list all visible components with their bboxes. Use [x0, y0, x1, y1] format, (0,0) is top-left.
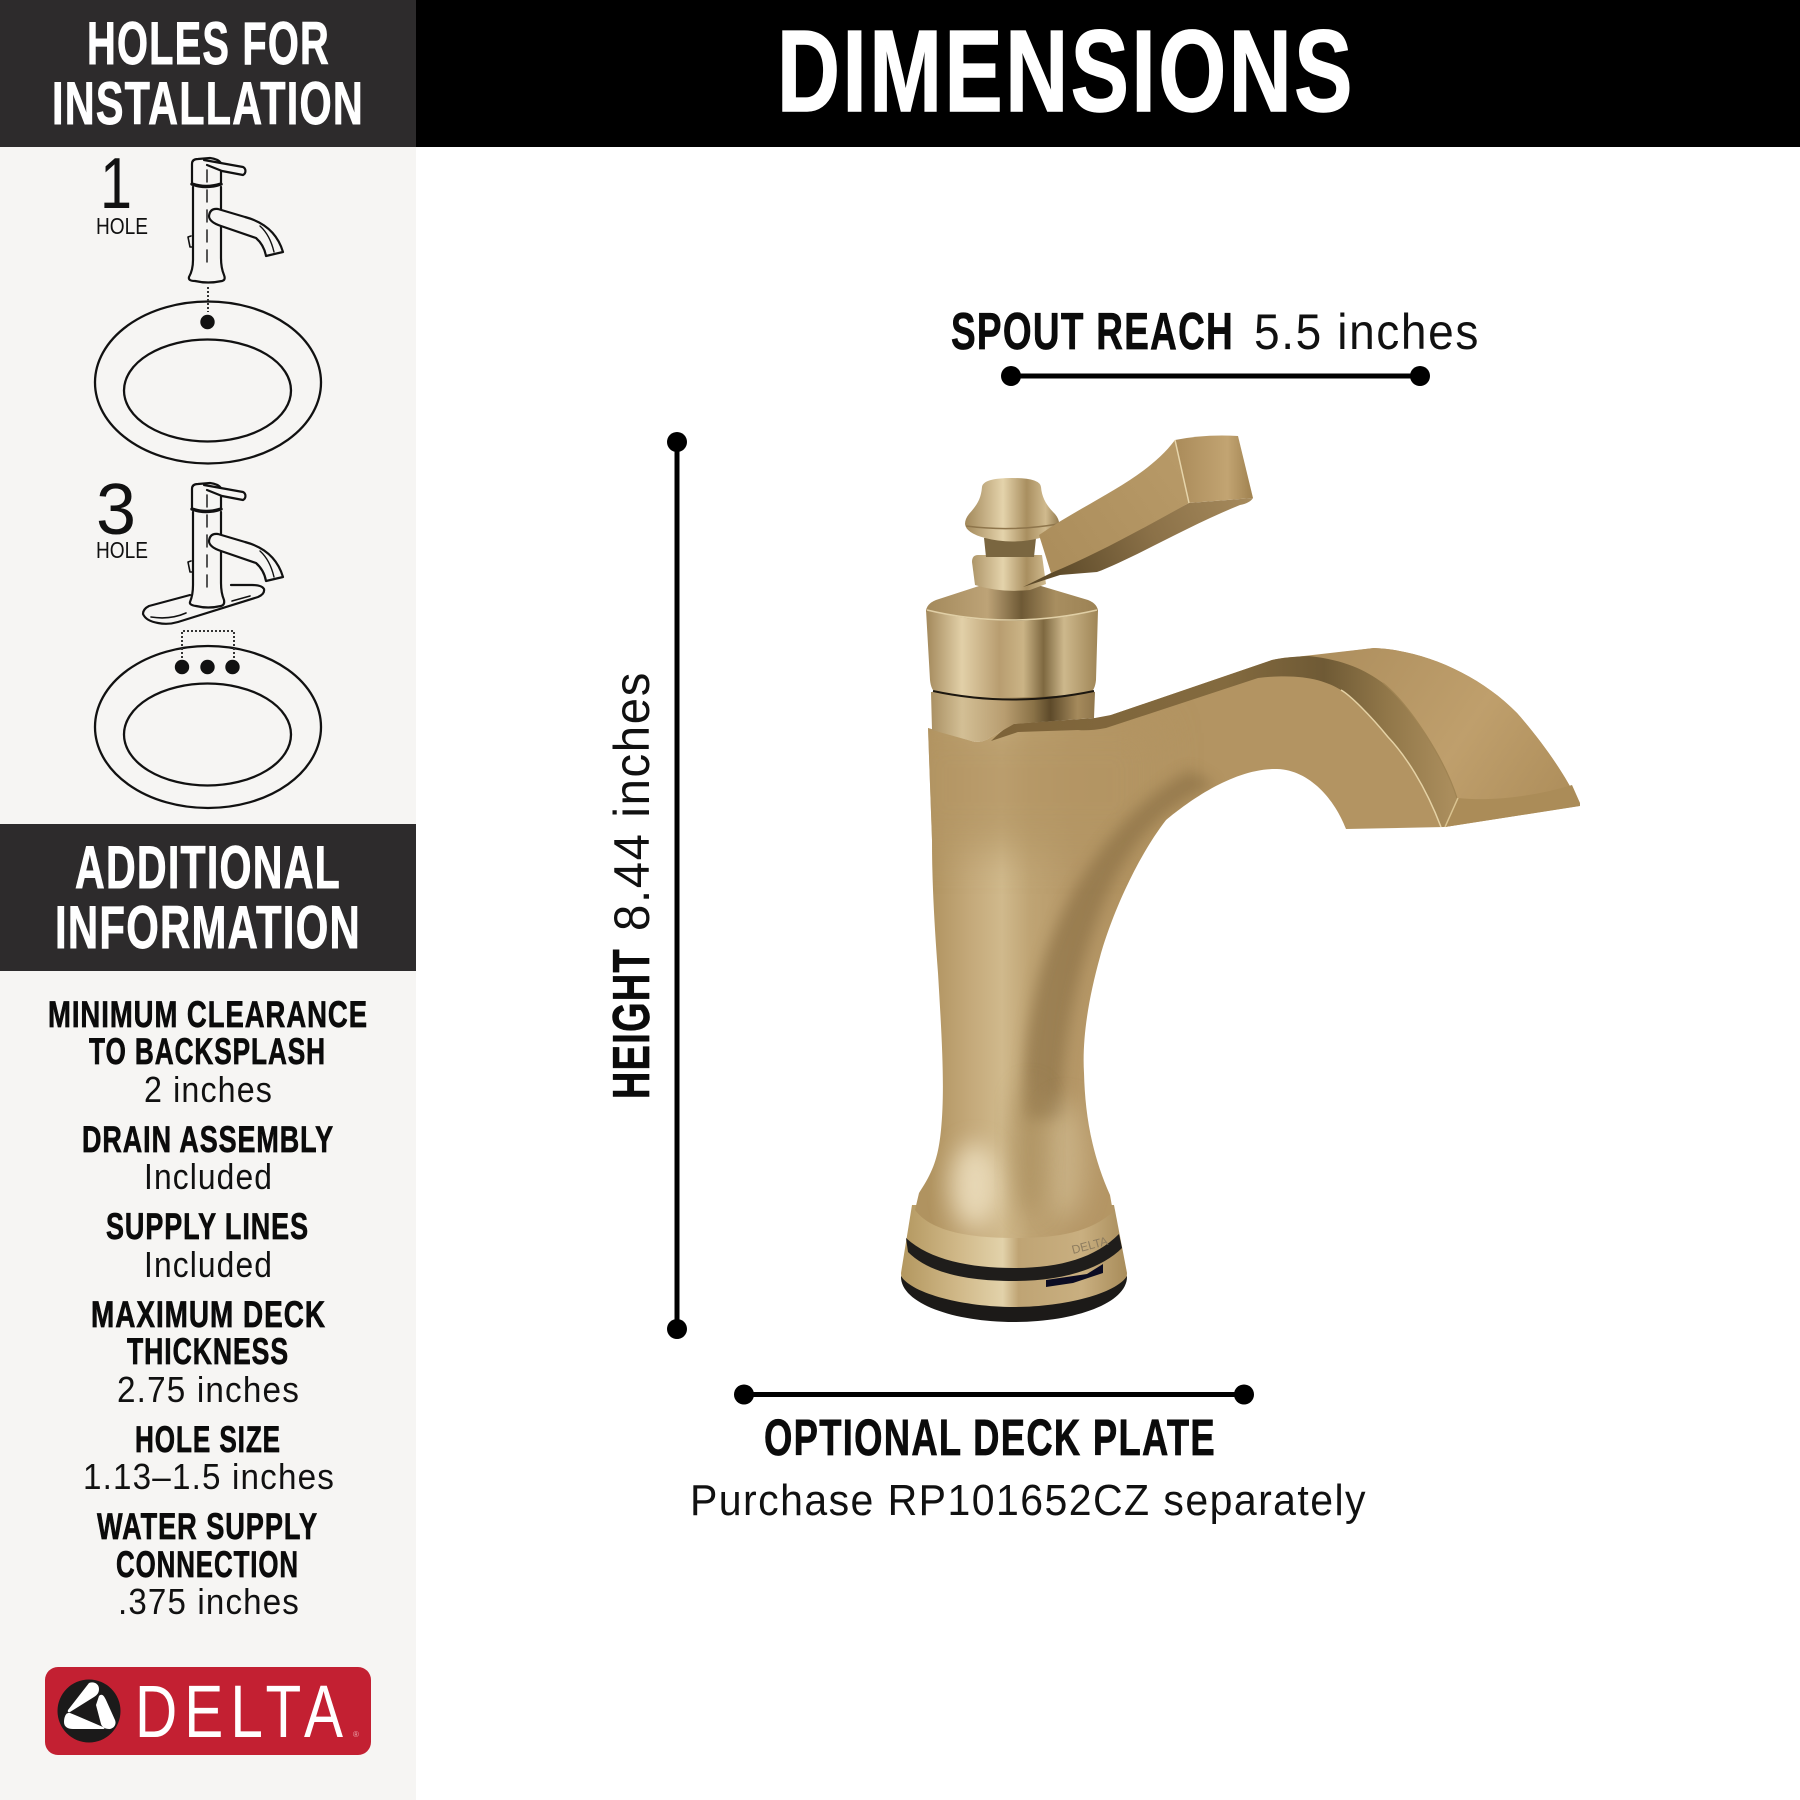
logo: Delta: ® [353, 1730, 359, 1739]
text block: supply lines: Included [144, 1244, 273, 1285]
text block: supply lines [106, 1206, 309, 1285]
handle knob [965, 478, 1059, 591]
text block: minimum clearance to backsplash [48, 994, 368, 1110]
label: 1 hole: HOLE [96, 213, 148, 239]
dimension line: height [667, 432, 687, 1339]
logo: Delta [45, 1667, 371, 1755]
label: 3 hole: 3 [96, 470, 136, 550]
base of faucet: DELTA [1070, 1234, 1109, 1257]
title band: dimensions [416, 0, 1800, 147]
text block: hole size [83, 1419, 335, 1497]
text block: maximum deck thickness: THICKNESS [127, 1331, 289, 1372]
heading band: holes for installation [0, 0, 416, 147]
icon: faucet line drawing, one hole [188, 158, 283, 282]
faucet illustration [900, 436, 1580, 1322]
spout reach label: SPOUT REACH [951, 303, 1234, 361]
logo: Delta: DELTA [135, 1670, 350, 1753]
text block: minimum clearance to backsplash: 2 inches [144, 1069, 273, 1110]
spout reach label: 5.5 inches [1254, 304, 1480, 360]
optional deck plate label: OPTIONAL DECK PLATE [764, 1409, 1216, 1466]
base of faucet [901, 1205, 1127, 1322]
title band: dimensions: DIMENSIONS [777, 6, 1355, 136]
collar cylinder [926, 584, 1098, 742]
icon: faucet line drawing with deck plate [143, 483, 283, 624]
text block: water supply connection: CONNECTION [116, 1544, 299, 1585]
height label: HEIGHT [603, 948, 661, 1099]
label: 3 hole: HOLE [96, 537, 148, 563]
height label [603, 671, 661, 1099]
text block: maximum deck thickness: 2.75 inches [117, 1369, 300, 1410]
text block: drain assembly: Included [144, 1156, 273, 1197]
heading band: holes for installation: HOLES FOR [87, 10, 330, 77]
text block: water supply connection [97, 1506, 318, 1622]
height label: 8.44 inches [604, 671, 660, 931]
heading band: additional information: ADDITIONAL [75, 834, 341, 901]
panel: left sidebar [0, 0, 416, 1800]
optional deck plate label: Purchase RP101652CZ separately [690, 1476, 1367, 1525]
handle lever [1023, 436, 1253, 587]
text block: drain assembly: DRAIN ASSEMBLY [82, 1119, 334, 1160]
text block: water supply connection: WATER SUPPLY [97, 1506, 318, 1547]
icon: sink with three holes [95, 631, 321, 808]
text block: maximum deck thickness [91, 1294, 326, 1410]
icon: sink with one hole [95, 287, 321, 464]
text block: maximum deck thickness: MAXIMUM DECK [91, 1294, 326, 1335]
label: 1 hole: 1 [100, 144, 132, 224]
dimension line: optional deck plate [734, 1384, 1254, 1404]
heading band: additional information [0, 824, 416, 971]
heading band: holes for installation: INSTALLATION [52, 70, 364, 137]
dimension line: spout reach [1001, 366, 1430, 386]
text block: supply lines: SUPPLY LINES [106, 1206, 309, 1247]
label: 1 hole [96, 144, 148, 239]
heading band: additional information: INFORMATION [55, 894, 361, 961]
body and spout [900, 648, 1580, 1238]
text block: minimum clearance to backsplash: MINIMUM CLEARANCE [48, 994, 368, 1035]
label: 3 hole [96, 470, 148, 563]
text block: drain assembly [82, 1119, 334, 1197]
optional deck plate label [690, 1409, 1367, 1525]
text block: hole size: HOLE SIZE [135, 1419, 281, 1460]
text block: hole size: 1.13–1.5 inches [83, 1456, 335, 1497]
text block: minimum clearance to backsplash: TO BACKSPLASH [89, 1031, 326, 1072]
text block: water supply connection: .375 inches [118, 1581, 300, 1622]
